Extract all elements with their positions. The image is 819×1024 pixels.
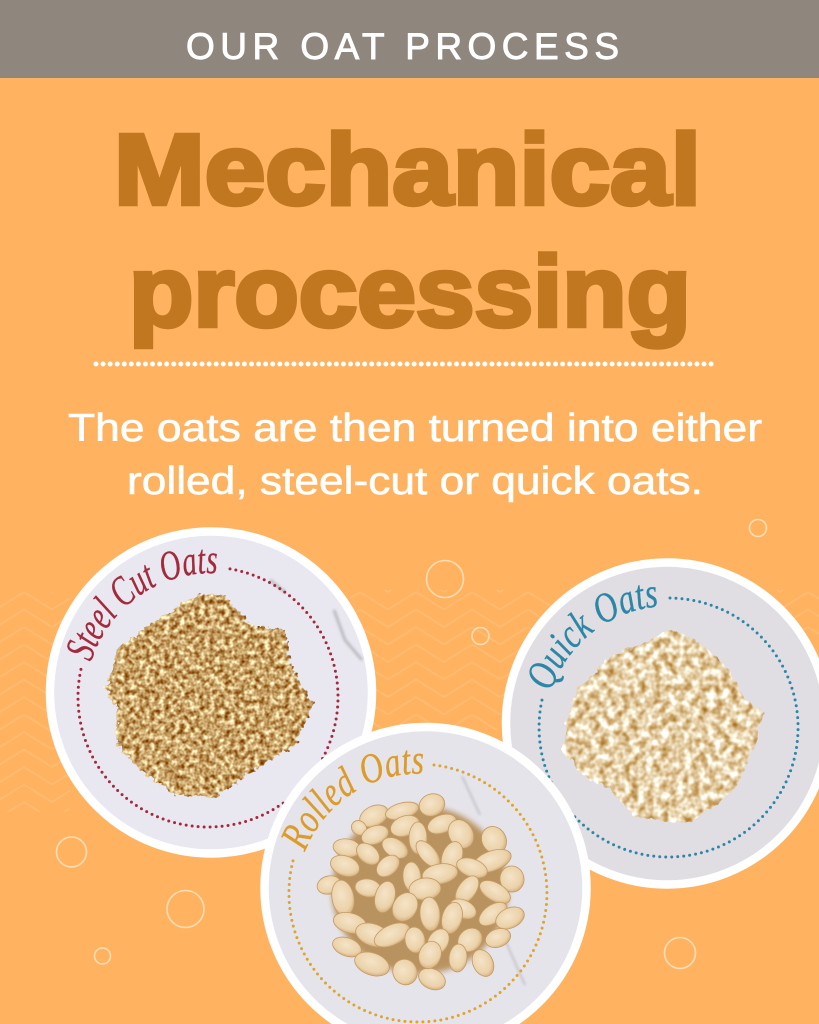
panel: rolled oats [260,722,591,1024]
panel: steel cut oats [46,527,376,858]
dotted ring [289,765,547,1022]
label: Quick Oats [529,585,657,688]
header bar [0,0,819,78]
subtitle: The oats are then turned into either [68,407,762,450]
label: Steel Cut Oats [67,550,217,662]
oat pile [563,630,763,823]
title [114,114,701,348]
background zigzag pattern [0,590,819,812]
title: processing [129,236,691,348]
header text: OUR OAT PROCESS [186,26,619,67]
label: Rolled Oats [281,750,424,852]
dotted divider [96,362,718,366]
plate [506,562,819,884]
marble veins [462,776,525,985]
subtitle [68,407,762,503]
oat pile [315,790,528,994]
oat pile [106,594,313,798]
dotted ring [539,598,798,857]
plate [50,532,372,854]
decorative bubbles [56,520,766,968]
panel: quick oats [502,558,819,889]
marble veins [270,580,362,660]
subtitle: rolled, steel-cut or quick oats. [127,460,703,503]
plate [264,727,586,1024]
dotted ring [78,569,338,827]
title: Mechanical [114,114,701,226]
